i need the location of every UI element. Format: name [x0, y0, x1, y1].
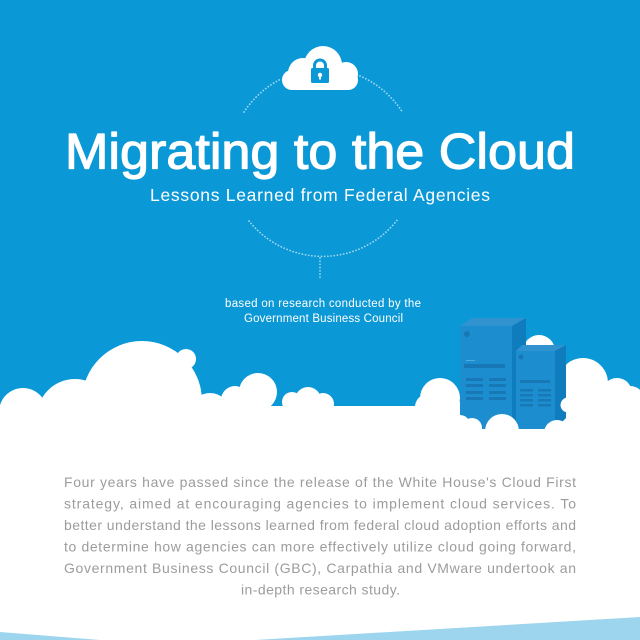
subtitle: Lessons Learned from Federal Agencies — [150, 185, 490, 205]
intro paragraph: better understand the lessons learned from federal cloud adoption efforts and — [64, 517, 576, 533]
panel: white lower background — [0, 406, 640, 640]
icon: cloud with padlock — [282, 46, 358, 90]
icon: tall server — [460, 318, 526, 431]
intro paragraph: Four years have passed since the release of the White House's Cloud First — [64, 474, 576, 490]
dotted connector line — [319, 258, 321, 279]
panel: blue header background — [0, 0, 640, 407]
clouds: left group — [0, 341, 334, 461]
title: Migrating to the Cloud — [65, 124, 575, 180]
icon: short server — [516, 345, 566, 429]
bottom pale blue wedge: right — [255, 617, 640, 640]
intro paragraph: in-depth research study. — [241, 582, 400, 598]
dotted arc: upper left — [244, 79, 281, 112]
intro paragraph: Government Business Council (GBC), Carpathia and VMware undertook an — [64, 560, 576, 576]
attribution text — [225, 298, 421, 325]
clouds: foreground puffs over servers — [440, 398, 640, 449]
attribution text: Government Business Council — [244, 313, 403, 325]
attribution text: based on research conducted by the — [225, 298, 421, 310]
bottom pale blue wedge: left — [0, 632, 100, 640]
dotted arc: upper right — [360, 76, 403, 113]
intro paragraph: strategy, aimed at encouraging agencies to implement cloud services. To — [64, 496, 576, 512]
intro paragraph: to determine how agencies can more effectively utilize cloud going forward, — [64, 538, 576, 554]
dotted arc: lower — [249, 219, 398, 256]
clouds: right group behind servers — [415, 335, 640, 440]
intro paragraph — [64, 474, 576, 598]
